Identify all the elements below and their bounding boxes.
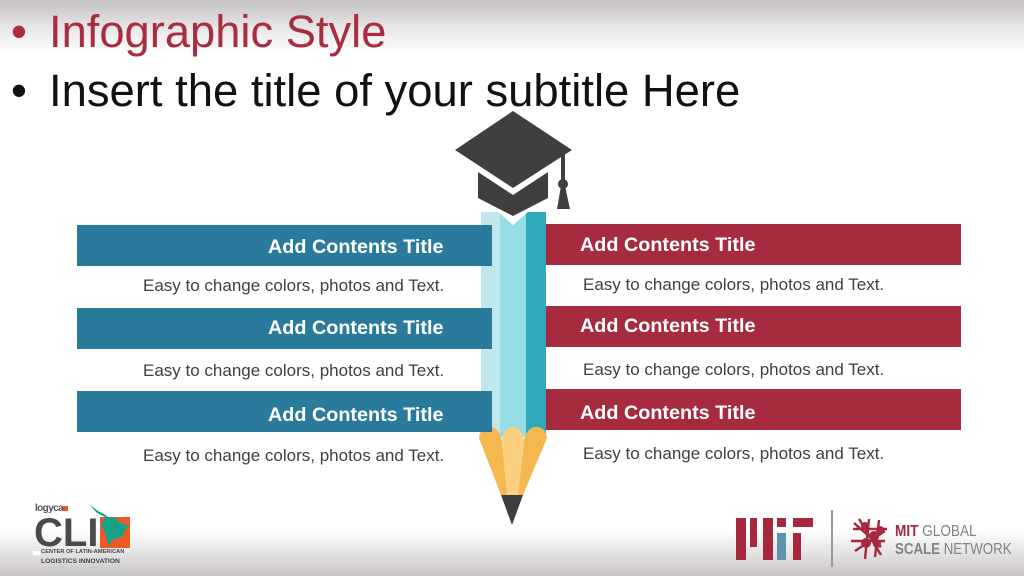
description: Easy to change colors, photos and Text. — [583, 360, 884, 379]
tagline second line: LOGISTICS INNOVATION — [41, 558, 120, 565]
panel: left item 3 — [77, 391, 492, 465]
panel: right item 1 — [546, 224, 961, 294]
icon: map of Latin America — [89, 504, 130, 548]
CLI letters: CLI — [34, 511, 98, 555]
tagline: CENTER OF LATIN-AMERICAN — [41, 549, 124, 555]
description: Easy to change colors, photos and Text. — [143, 361, 444, 380]
description: Easy to change colors, photos and Text. — [143, 446, 444, 465]
panel: right item 2 — [546, 306, 961, 379]
icon: graduation cap — [455, 111, 572, 216]
bar heading — [77, 225, 492, 266]
icon: network mark — [851, 518, 887, 560]
wordmark line 2: SCALE NETWORK — [895, 541, 1012, 558]
pencil and graduation cap — [455, 111, 572, 525]
bottom gradient band — [0, 530, 1024, 576]
wordmark line 1: MIT GLOBAL — [895, 523, 977, 540]
bar heading: Add Contents Title — [268, 317, 443, 339]
title line: Infographic Style: Infographic Style — [49, 6, 386, 57]
logyca wordmark: logyca — [35, 503, 63, 514]
white strip beside tagline — [33, 551, 40, 555]
bar heading — [546, 306, 961, 347]
bar heading: Add Contents Title — [580, 234, 755, 256]
description: Easy to change colors, photos and Text. — [583, 275, 884, 294]
panel: right item 3 — [546, 389, 961, 463]
bar heading — [77, 391, 492, 432]
subtitle line: Insert the title of your subtitle Here — [49, 65, 740, 116]
bar heading: Add Contents Title — [268, 236, 443, 258]
icon: orange square — [63, 506, 68, 511]
top gradient band — [0, 0, 1024, 56]
bar heading — [546, 389, 961, 430]
logo: MIT — [736, 518, 813, 560]
pencil tip — [479, 427, 547, 525]
bar heading: Add Contents Title — [580, 315, 755, 337]
bar heading — [546, 224, 961, 265]
logo: MIT Global Scale Network — [851, 518, 1012, 560]
title line: Infographic Style: • — [11, 6, 27, 57]
bar heading: Add Contents Title — [580, 402, 755, 424]
bar heading: Add Contents Title — [268, 404, 443, 426]
panel: left item 1 — [77, 225, 492, 295]
bar heading — [77, 308, 492, 349]
panel: left item 2 — [77, 308, 492, 380]
description: Easy to change colors, photos and Text. — [143, 276, 444, 295]
description: Easy to change colors, photos and Text. — [583, 444, 884, 463]
pencil body — [481, 205, 546, 437]
title — [11, 6, 740, 116]
subtitle line: • — [11, 65, 27, 116]
logo: CLI — [33, 503, 130, 565]
divider between logos — [831, 510, 833, 567]
